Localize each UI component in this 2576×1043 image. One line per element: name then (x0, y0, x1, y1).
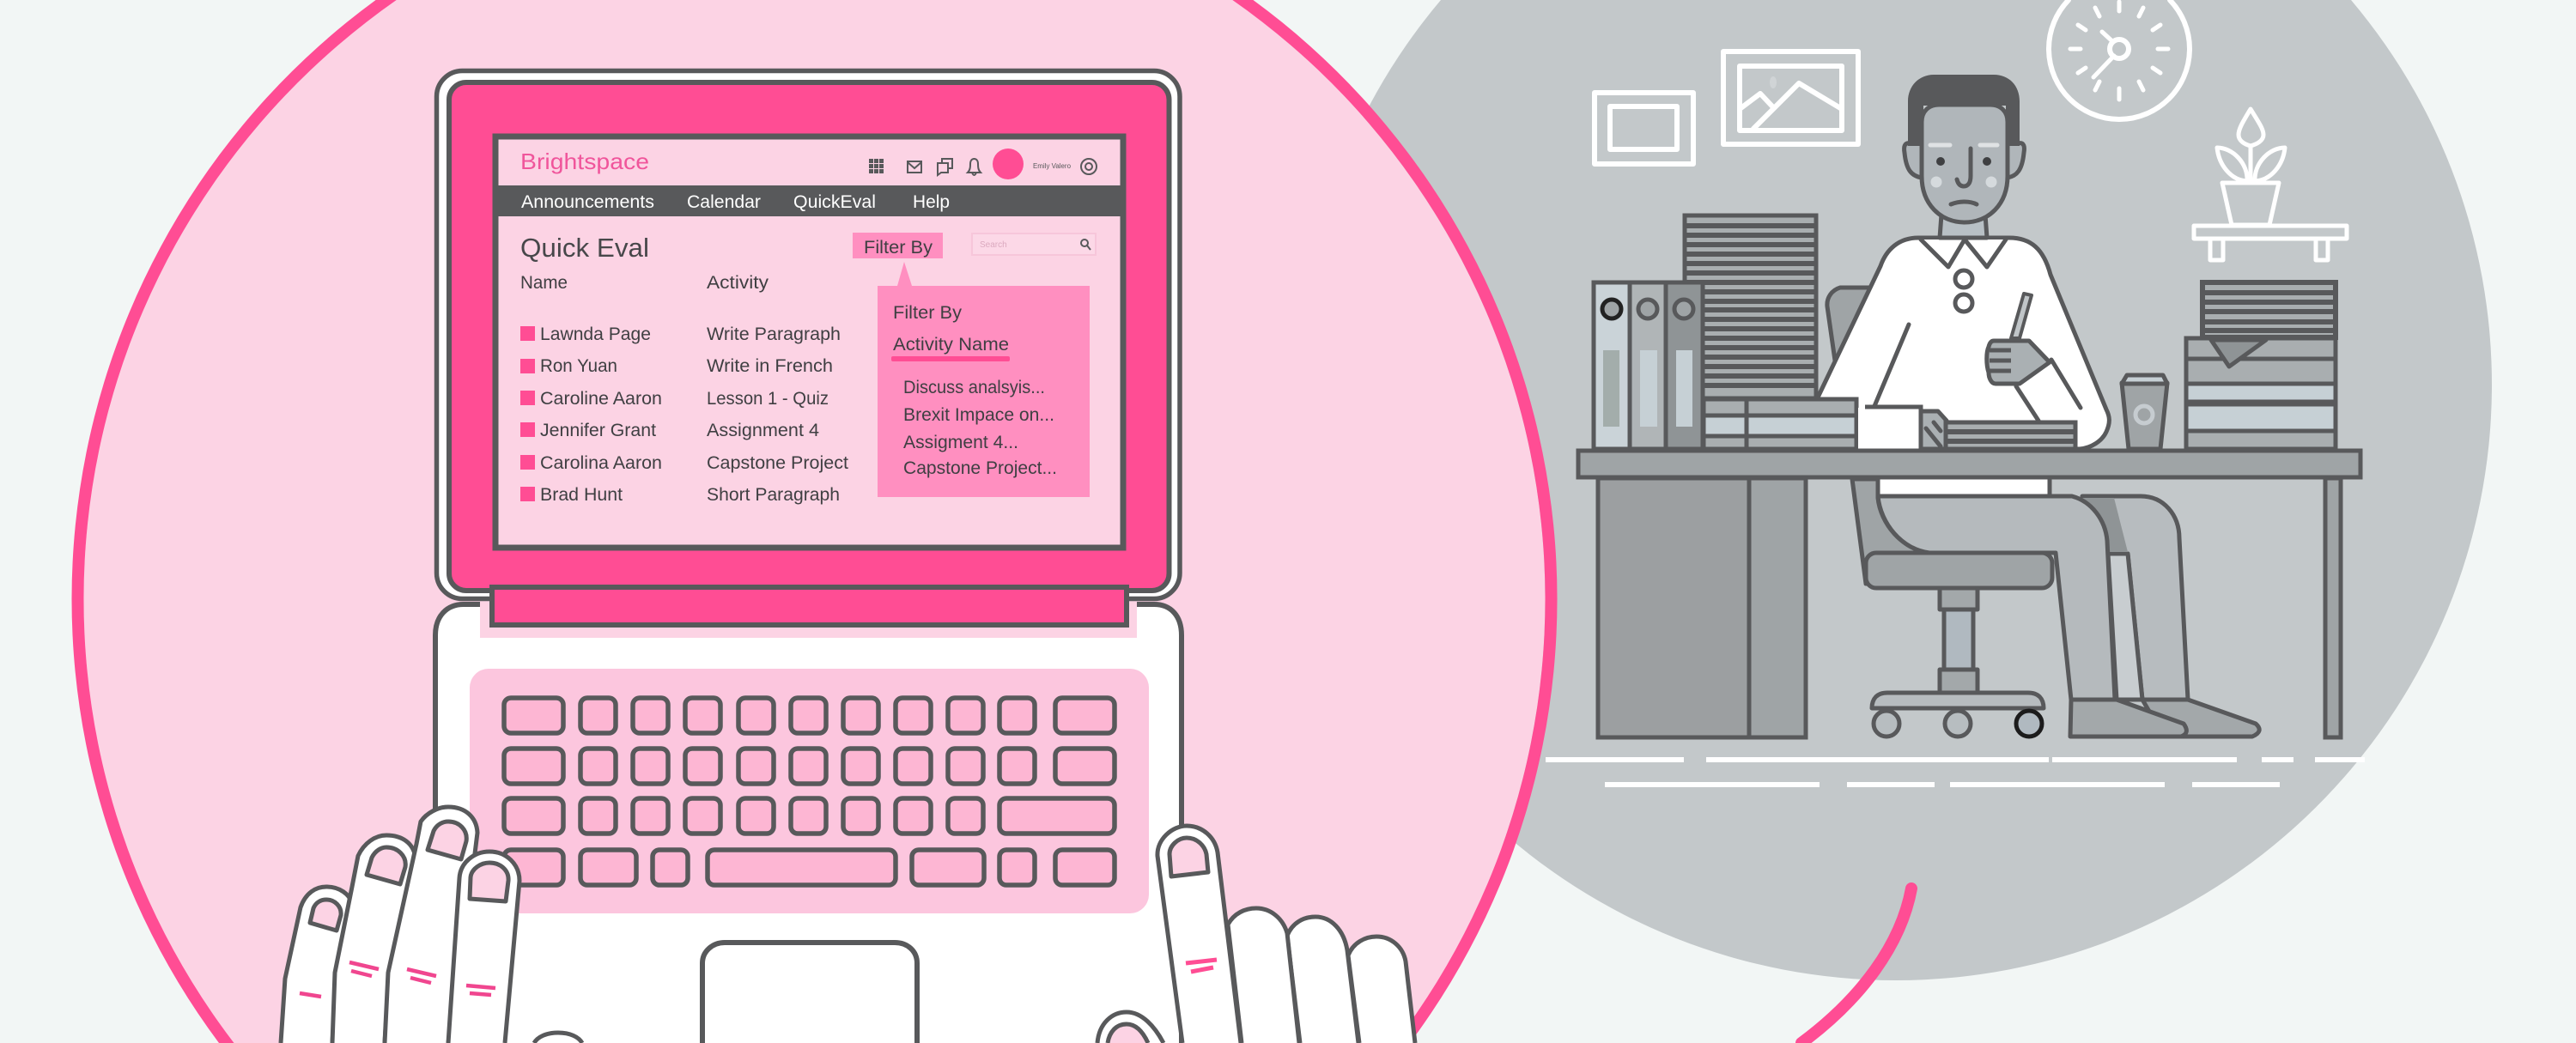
column headers: Activity (707, 273, 769, 293)
hand with fist (1987, 341, 2050, 384)
shirt (1818, 238, 2109, 449)
folded paper notch (2211, 340, 2266, 367)
binders (1594, 282, 1703, 449)
dropdown items: Capstone Project... (903, 458, 1057, 478)
left hand (281, 807, 582, 1043)
activities (707, 324, 848, 505)
activities: Capstone Project (707, 453, 848, 473)
user name: Emily Valero (1033, 162, 1072, 170)
wall clock (2049, 0, 2190, 119)
lid pink bezel (449, 82, 1170, 591)
avatar (993, 149, 1024, 179)
dropdown items: Brexit Impace on... (903, 405, 1054, 425)
dropdown items: Assigment 4... (903, 433, 1018, 452)
left thumb (534, 1033, 582, 1043)
filter label: Filter By (864, 238, 933, 258)
right index finger (1157, 826, 1241, 1043)
desk and drawers (1578, 451, 2360, 737)
dropdown heading: Filter By (893, 303, 963, 323)
potted plant on shelf (2194, 109, 2347, 260)
far leg (2082, 496, 2188, 700)
circle ring right (1232, 0, 1558, 1043)
student names (540, 324, 662, 505)
right lower paper stack (2186, 338, 2336, 449)
trackpad (702, 943, 917, 1043)
office chair back lower (1852, 479, 1929, 584)
mouth (1951, 202, 1977, 204)
left hand on desk (1921, 411, 1947, 449)
hinge shadow (480, 601, 1137, 638)
student names: Ron Yuan (540, 356, 617, 376)
student names: Caroline Aaron (540, 389, 662, 409)
desk top (1578, 451, 2360, 477)
left nails (310, 822, 508, 931)
shirt edge (2047, 478, 2052, 495)
near leg (1878, 496, 2115, 700)
panel: pink laptop circle (71, 0, 1558, 1043)
search box (972, 233, 1096, 255)
pink connector arc (1801, 888, 1911, 1043)
eyes (1936, 157, 1991, 166)
left hand fingers (1926, 422, 1941, 446)
left index finger (448, 852, 519, 1043)
nav labels: Help (913, 192, 950, 212)
column headers (520, 273, 769, 293)
column headers: Name (520, 273, 568, 293)
right hand (1097, 826, 1415, 1043)
pen (2011, 294, 2032, 338)
hair (1908, 75, 2020, 146)
collar (1921, 240, 2006, 267)
brand: Brightspace (520, 149, 649, 174)
paper stripes (1685, 226, 1816, 385)
floor lines (1546, 760, 2365, 785)
circle fill (83, 0, 1546, 1043)
picture frame small (1595, 93, 1693, 164)
student names: Jennifer Grant (540, 421, 656, 440)
binder rings (1602, 300, 1621, 318)
drawers (1598, 478, 1749, 737)
nav labels: Calendar (687, 192, 761, 212)
paper edge (1865, 407, 1921, 449)
row bullets (520, 326, 535, 501)
bell icon (968, 159, 981, 175)
activities: Assignment 4 (707, 421, 819, 440)
ears (1905, 143, 2024, 178)
neck (1940, 215, 1987, 238)
nav labels (521, 192, 950, 212)
picture frame landscape (1723, 52, 1858, 144)
activities: Write in French (707, 356, 833, 376)
laptop base (435, 604, 1182, 1043)
nav bar (498, 185, 1121, 216)
chair wheels (1874, 711, 1899, 737)
gear icon (1081, 159, 1097, 174)
page title: Quick Eval (520, 233, 649, 263)
activities: Short Paragraph (707, 485, 840, 505)
right upper paper stack (2202, 282, 2336, 337)
binder labels (1603, 350, 1692, 427)
student names: Lawnda Page (540, 324, 651, 344)
sheet of paper (1858, 408, 1921, 449)
right ring finger (1287, 917, 1358, 1043)
right middle finger (1228, 908, 1299, 1043)
mail icon (908, 161, 921, 173)
screen (495, 136, 1123, 548)
left pinky (281, 887, 352, 1043)
shirt below desk (1880, 478, 2049, 494)
right thumb (1097, 1012, 1163, 1043)
far shoe (2142, 700, 2259, 737)
tall paper stack (1685, 215, 1816, 398)
right index nail (1170, 838, 1208, 876)
activities: Write Paragraph (707, 324, 841, 344)
gap between legs (2108, 554, 2142, 700)
student names: Carolina Aaron (540, 453, 662, 473)
shirt buttons (1955, 270, 1972, 312)
dropdown underline (891, 356, 1010, 361)
middle paper stack (1946, 422, 2075, 449)
arm creases (1874, 324, 2081, 421)
circle ring left (71, 0, 397, 1043)
nav labels: QuickEval (793, 192, 876, 212)
desk leg (2325, 478, 2341, 737)
keyboard (470, 669, 1149, 913)
right pinky (1348, 937, 1415, 1043)
near shoe (2070, 700, 2186, 737)
filter button (853, 233, 943, 258)
coffee cup (2122, 375, 2167, 449)
student names: Brad Hunt (540, 485, 623, 505)
grid icon (869, 159, 884, 173)
hinge bar (492, 587, 1127, 625)
face (1922, 105, 2008, 222)
cheeks (1930, 177, 1997, 187)
left middle finger (385, 807, 477, 1043)
dropdown items: Discuss analsyis... (903, 378, 1045, 397)
chair back upper (1827, 288, 1869, 361)
shadow between legs (2082, 498, 2128, 552)
chat icon (938, 159, 952, 175)
right thumb nail (1108, 1024, 1148, 1043)
dropdown subheading: Activity Name (893, 335, 1009, 355)
nav labels: Announcements (521, 192, 654, 212)
knuckle marks right (1186, 960, 1217, 972)
dropdown items (903, 378, 1057, 478)
activities: Lesson 1 - Quiz (707, 389, 829, 409)
key rows (504, 698, 1115, 885)
search box: Search (980, 240, 1007, 250)
man (1818, 75, 2109, 449)
chair seat and base (1866, 553, 2052, 737)
laptop lid (436, 70, 1180, 599)
panel: grey office circle (1300, 0, 2492, 980)
eyebrows (1930, 143, 1997, 148)
nose (1957, 149, 1971, 186)
left ring finger (332, 835, 416, 1043)
lower paper stack (1704, 399, 1856, 449)
knuckle marks left (300, 962, 495, 997)
filter dropdown (878, 262, 1090, 497)
keyboard well (470, 669, 1149, 913)
finger lines (1990, 350, 2011, 371)
